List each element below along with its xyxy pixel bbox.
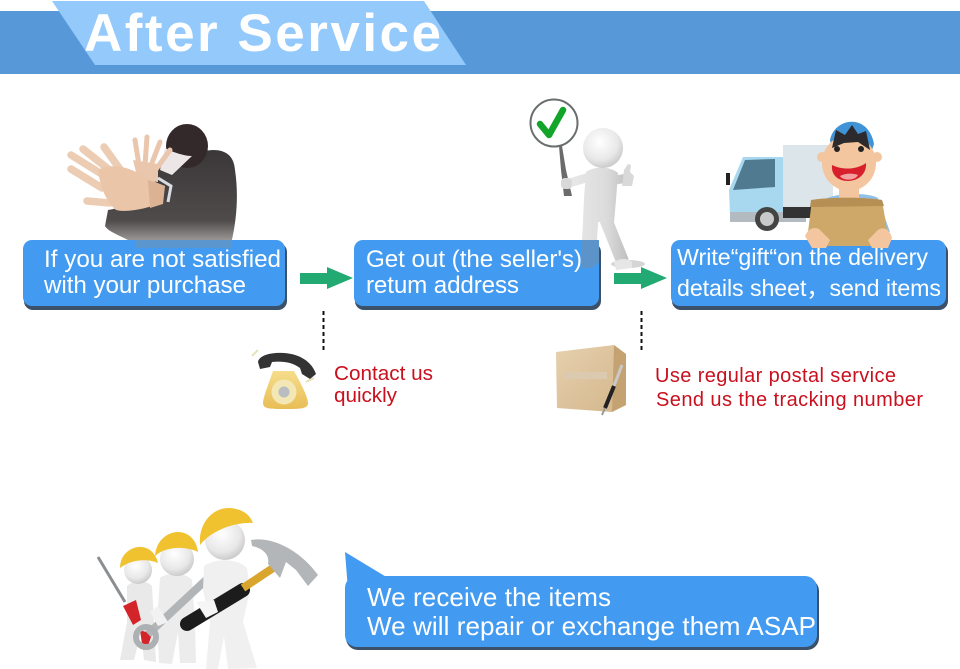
text: postal instructions: Use regular postal service [655, 365, 896, 387]
arrow: step 2 to step 3 [614, 267, 667, 289]
illustration: delivery truck [726, 145, 833, 231]
box 2 text: retum address [366, 272, 519, 299]
box 3 text: Write“gift“on the delivery [677, 244, 928, 270]
arrow: step 1 to step 2 [300, 267, 353, 289]
screwdriver [98, 557, 125, 602]
worker right [203, 560, 257, 669]
text: postal instructions: Send us the tracking number [656, 389, 923, 411]
step box 2 [354, 240, 601, 310]
icon: cardboard box with pen [556, 345, 626, 415]
header band [0, 1, 960, 74]
hands [805, 228, 830, 248]
bubble text: We will repair or exchange them ASAP [367, 611, 816, 641]
box 1 text: If you are not satisfied [44, 246, 281, 273]
box 1 text: with your purchase [43, 272, 246, 299]
text: contact us quickly: Contact us [334, 362, 433, 385]
title: After Service [84, 4, 441, 63]
bubble text: We receive the items [367, 582, 611, 612]
illustration: smiling courier holding a parcel [805, 122, 892, 248]
illustration: white figure with green check sign [530, 100, 645, 270]
worker left [120, 582, 156, 662]
hammer [187, 590, 243, 624]
dashed connector 1 [322, 311, 324, 351]
illustration: three workers with tools [98, 508, 318, 669]
figure body [611, 260, 645, 268]
step box 3 [671, 240, 948, 310]
dashed connector 2 [640, 311, 642, 351]
wrench [148, 580, 206, 634]
check sign [530, 100, 578, 146]
front hand [71, 147, 122, 203]
worker middle [157, 574, 196, 664]
box 3 text: details sheet，send items [677, 275, 941, 301]
icon: yellow telephone [252, 350, 316, 409]
box 2 text: Get out (the seller's) [366, 246, 582, 273]
sign handle [559, 146, 572, 196]
illustration: man refusing with raised hands [71, 124, 237, 244]
speech bubble [345, 552, 819, 650]
mouth [832, 163, 866, 181]
fingers of the back hand [135, 137, 170, 172]
title ribbon [52, 1, 466, 65]
text: contact us quickly: quickly [334, 384, 398, 407]
step box 1 [23, 240, 287, 310]
parcel [808, 198, 888, 246]
